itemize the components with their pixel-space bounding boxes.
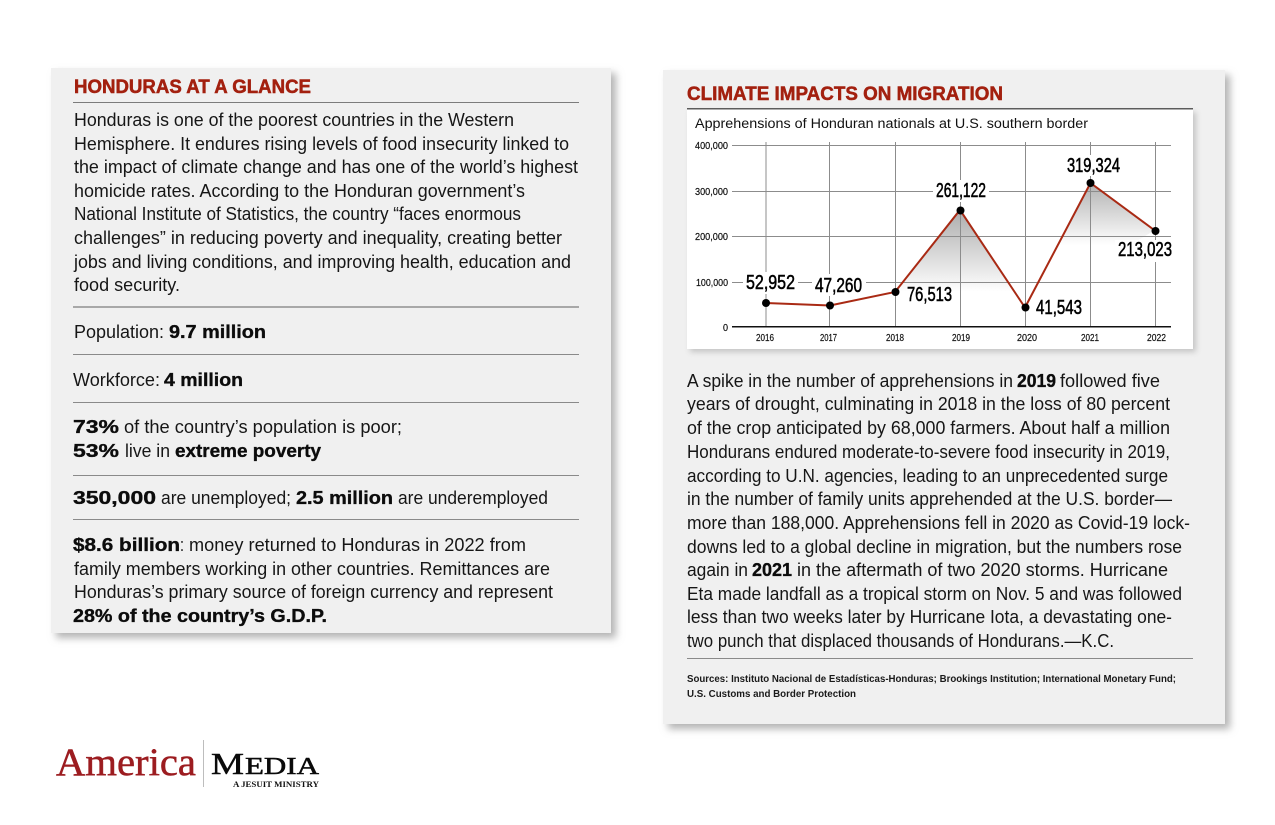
sources: Sources: Instituto Nacional de Estadísticas-Honduras; Brookings Institution; International Monetary Fund; (687, 674, 1176, 685)
logo: America Media: A JESUIT MINISTRY (233, 779, 319, 789)
x axis labels: 2017 (820, 333, 837, 344)
text block: migration narrative: more than 188,000. Apprehensions fell in 2020 as Covid-19 lock- (687, 513, 1190, 533)
text block: migration narrative: according to U.N. agencies, leading to an unprecedented surge (687, 466, 1168, 486)
stat: workforce (73, 370, 243, 390)
stat: poverty: 53% (73, 441, 119, 461)
text block: overview: National Institute of Statistics, the country “faces enormous (74, 204, 521, 224)
stat: poverty: extreme poverty (175, 441, 321, 461)
text block: migration narrative: in the number of family units apprehended at the U.S. border— (687, 489, 1172, 509)
text block: overview: jobs and living conditions, and improving health, education and (73, 252, 571, 272)
text block: migration narrative (687, 371, 1190, 651)
text block: migration narrative: A spike in the number of apprehensions in (687, 371, 1013, 391)
stat: poverty: 73% (73, 417, 119, 437)
stat: remittances: $8.6 billion (73, 535, 180, 555)
x axis labels: 2018 (886, 333, 904, 344)
x axis labels: 2019 (952, 333, 970, 344)
x axis labels: 2022 (1147, 333, 1166, 344)
stat: employment: are unemployed; (161, 488, 291, 508)
text block: overview: Hemisphere. It endures rising levels of food insecurity linked to (74, 134, 569, 154)
value labels: 319,324 (1067, 155, 1120, 177)
value labels: 52,952 (746, 272, 795, 294)
stat: workforce: 4 million (164, 370, 243, 390)
logo: America Media: EDIA (245, 754, 320, 780)
text block: overview: homicide rates. According to the Honduran government’s (74, 181, 525, 201)
stat: remittances: : (180, 535, 184, 555)
stat: employment (73, 488, 548, 508)
stat: employment: are underemployed (398, 488, 548, 508)
text block: migration narrative: Eta made landfall as a tropical storm on Nov. 5 and was followed (687, 584, 1182, 604)
value labels: 76,513 (907, 284, 952, 306)
text block: migration narrative: two punch that displaced thousands of Hondurans.—K.C. (687, 631, 1114, 651)
x axis labels: 2021 (1081, 333, 1099, 344)
x axis labels (756, 333, 1166, 344)
text block: overview: food security. (74, 275, 180, 295)
logo: America Media (56, 740, 320, 789)
x axis labels: 2016 (756, 333, 774, 344)
logo: America Media: M (211, 746, 244, 781)
text block: migration narrative: of the crop anticipated by 68,000 farmers. About half a million (687, 418, 1170, 438)
text block: migration narrative: Hondurans endured moderate-to-severe food insecurity in 2019, (687, 442, 1170, 462)
data line (766, 183, 1156, 308)
text block: overview: the impact of climate change and has one of the world’s highest (74, 157, 578, 177)
value labels: 41,543 (1036, 297, 1082, 319)
text block: migration narrative: 2021 (752, 560, 792, 580)
y axis labels: 300,000 (695, 187, 728, 198)
stat: employment: 350,000 (73, 488, 156, 508)
sources: U.S. Customs and Border Protection (687, 689, 856, 700)
line chart: apprehensions (687, 108, 1196, 352)
stat: employment: 2.5 million (296, 488, 393, 508)
panel: climate impacts on migration (663, 70, 1230, 729)
text block: migration narrative: again in (687, 560, 748, 580)
x axis labels: 2020 (1017, 333, 1037, 344)
y axis labels: 100,000 (696, 278, 728, 289)
stat: remittances (73, 535, 553, 626)
text block: migration narrative: followed five (1060, 371, 1160, 391)
stat: population: 9.7 million (169, 322, 266, 342)
text block: overview: Honduras is one of the poorest countries in the Western (74, 110, 514, 130)
value labels: 47,260 (815, 275, 862, 297)
value labels (743, 155, 1173, 319)
text block: overview: challenges” in reducing poverty and inequality, creating better (74, 228, 562, 248)
y axis labels: 0 (723, 323, 728, 334)
text block: migration narrative: in the aftermath of two 2020 storms. Hurricane (797, 560, 1168, 580)
chart title: Apprehensions of Honduran nationals at U.S. southern border (695, 116, 1089, 131)
stat: remittances: 28% of the country’s G.D.P. (73, 606, 327, 626)
text block: migration narrative: less than two weeks later by Hurricane Iota, a devastating one- (687, 607, 1172, 627)
stat: poverty: live in (125, 441, 170, 461)
stat: remittances: family members working in other countries. Remittances are (74, 559, 550, 579)
stat: poverty (73, 417, 402, 461)
heading: Honduras at a glance: HONDURAS AT A GLANCE (74, 77, 311, 98)
value labels: 213,023 (1118, 239, 1172, 261)
y axis labels (695, 141, 728, 334)
sources (687, 674, 1176, 700)
stat: remittances: Honduras’s primary source of foreign currency and represent (74, 582, 553, 602)
stat: remittances: money returned to Honduras in 2022 from (189, 535, 526, 555)
stat: workforce: Workforce: (73, 370, 160, 390)
logo: America Media: America (56, 741, 196, 784)
text block: migration narrative: downs led to a global decline in migration, but the numbers rose (687, 537, 1182, 557)
value labels: 261,122 (936, 180, 986, 202)
y axis labels: 400,000 (695, 141, 728, 152)
panel: Honduras at a glance (51, 68, 616, 638)
text block: migration narrative: 2019 (1017, 371, 1056, 391)
stat: poverty: of the country’s population is poor; (124, 417, 402, 437)
y axis labels: 200,000 (695, 232, 728, 243)
stat: population (74, 322, 266, 342)
heading: climate impacts on migration: CLIMATE IMPACTS ON MIGRATION (687, 84, 1003, 105)
text block: migration narrative: years of drought, culminating in 2018 in the loss of 80 percent (687, 394, 1170, 414)
text block: overview (73, 110, 578, 295)
stat: population: Population: (74, 322, 164, 342)
shaded areas (895, 182, 1155, 308)
data points (762, 179, 1160, 312)
